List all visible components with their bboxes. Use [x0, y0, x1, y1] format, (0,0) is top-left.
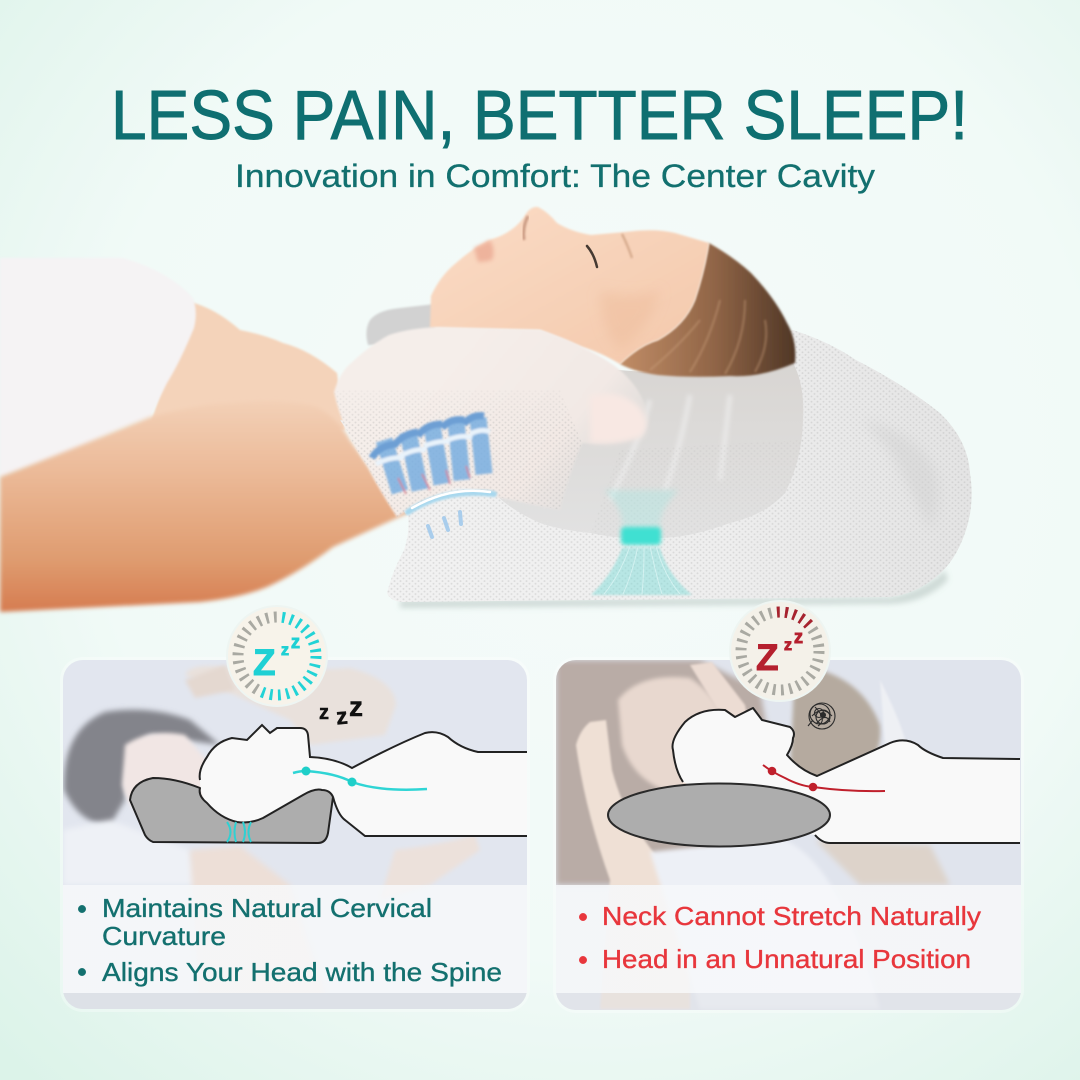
nostril shading: [524, 216, 528, 240]
hair: [620, 243, 795, 377]
badge: poor sleep: z: [794, 627, 803, 647]
sleeping zzz: z: [319, 702, 329, 724]
badge: good sleep: z: [281, 642, 289, 659]
text band: problems: [556, 885, 1021, 993]
problem bullets: [579, 901, 981, 974]
closed eye: [587, 246, 597, 267]
pillow body: [340, 330, 972, 602]
badge: poor sleep: Z: [756, 637, 779, 678]
cavity transparent zone: [498, 363, 803, 538]
benefit bullets: Maintains Natural Cervical: [102, 893, 432, 923]
cyan cavity marks: [227, 822, 251, 842]
silhouette outline: [200, 725, 527, 836]
badge: good sleep: z: [291, 632, 300, 652]
panel photo: sleeping woman: [63, 660, 527, 1009]
badge: poor sleep: [730, 601, 830, 701]
benefit bullets: Curvature: [102, 921, 226, 951]
cyan aligned spine line: [293, 766, 427, 790]
scribble: restless mind: [808, 703, 835, 729]
title: LESS PAIN, BETTER SLEEP!: [111, 76, 968, 154]
panel frame: [60, 657, 530, 1012]
benefit bullets: Aligns Your Head with the Spine: [102, 957, 502, 987]
panel: correct pillow: [60, 606, 530, 1012]
pillow back corner: [366, 304, 435, 345]
pillow shadow: [400, 570, 948, 608]
subtitle: Innovation in Comfort: The Center Cavity: [235, 158, 876, 194]
silhouette: [672, 708, 1020, 843]
chest: [150, 302, 345, 430]
panel: regular pillow: [553, 601, 1024, 1013]
problem bullets: Head in an Unnatural Position: [602, 944, 971, 974]
sleeping zzz: [319, 691, 363, 729]
ear: [590, 394, 646, 443]
towel: [0, 258, 196, 477]
problem bullets: Neck Cannot Stretch Naturally: [602, 901, 981, 931]
panel frame: [553, 657, 1024, 1013]
arm: [0, 401, 410, 612]
spine vertebrae: [372, 416, 490, 494]
face: [430, 207, 709, 364]
sleeping zzz: z: [335, 703, 349, 729]
red strained spine line: [763, 765, 885, 791]
hero photo: woman on cervical pillow: [0, 207, 972, 612]
cheek shading: [600, 290, 660, 350]
brow: [622, 234, 632, 258]
lips: [474, 240, 494, 262]
silhouette: [200, 725, 527, 836]
silhouette outline: [672, 708, 1020, 843]
translucent head and neck over pillow: [334, 327, 648, 517]
badge: good sleep: Z: [253, 642, 276, 683]
badge: poor sleep: z: [784, 637, 792, 654]
gray flat pillow: [608, 784, 830, 846]
gray contoured pillow: [130, 778, 333, 843]
pillow end shading: [860, 420, 939, 530]
sleeping zzz: z: [349, 691, 363, 722]
neck support arc and arrows: [408, 491, 494, 537]
benefit bullets: [78, 893, 502, 987]
text band: benefits: [63, 885, 527, 993]
panel photo: woman with headache: [556, 660, 1021, 1010]
cyan airflow through center cavity: [591, 490, 692, 595]
badge: good sleep: [227, 606, 327, 706]
